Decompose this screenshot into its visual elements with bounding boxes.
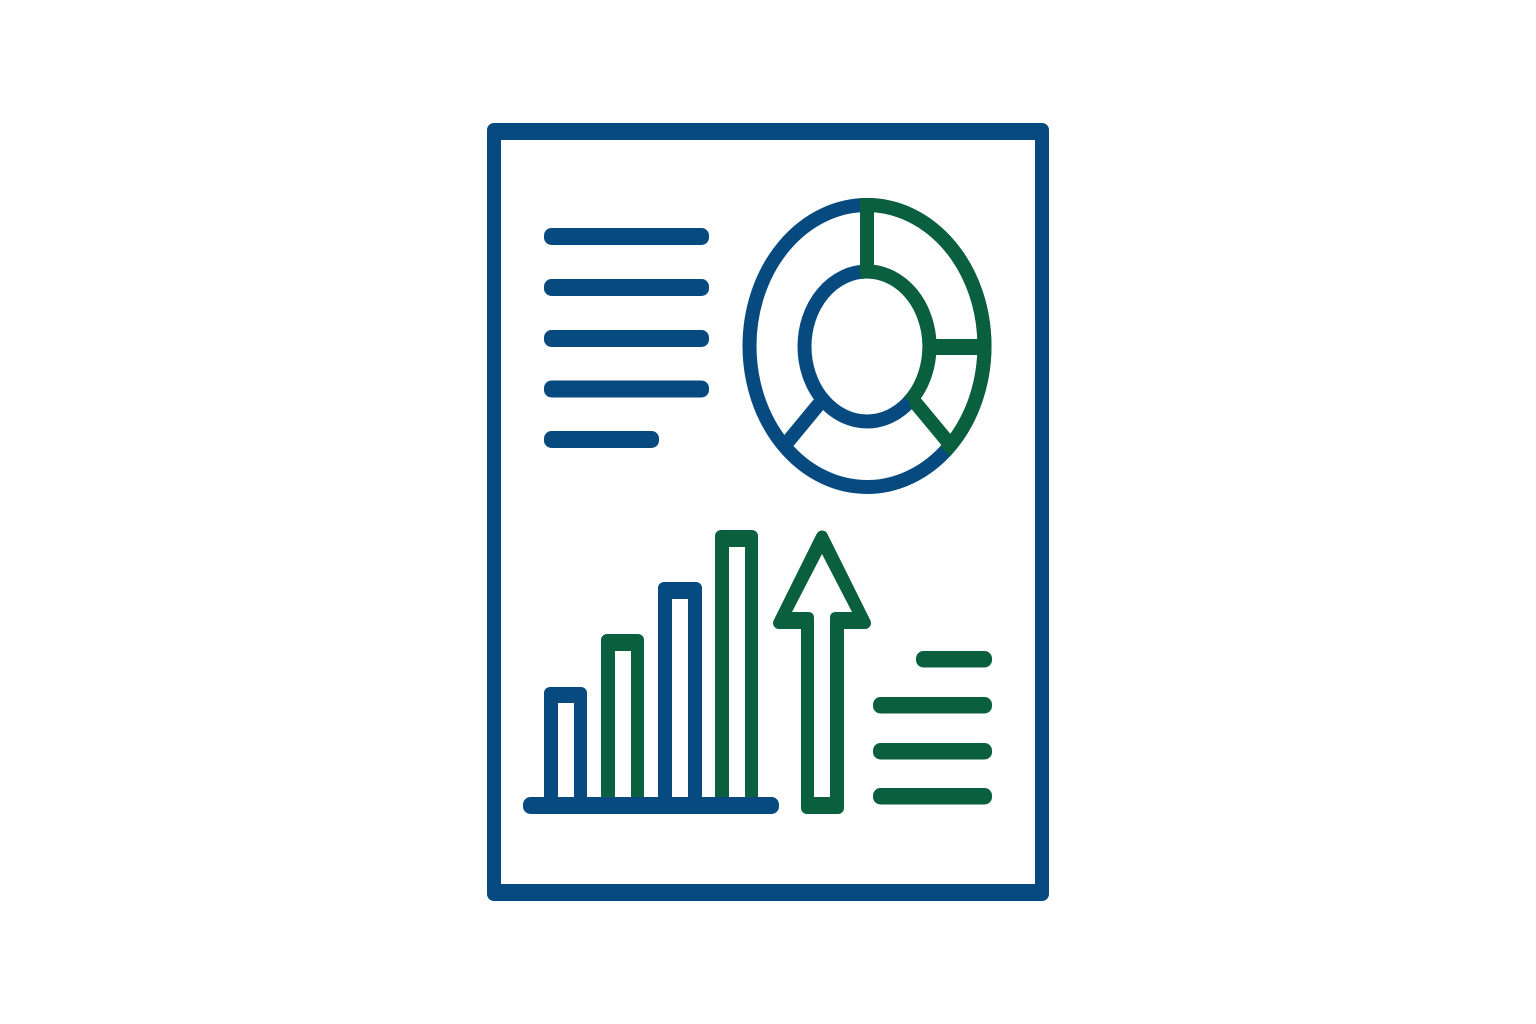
bar chart [523,530,779,814]
upward arrow [779,536,865,808]
text lines: lower right [873,651,992,804]
donut chart [750,199,984,487]
green ring segments and dividers [860,199,984,451]
bar 4 [715,530,758,800]
bar 3 [658,582,702,800]
blue ring and segment divider [750,205,984,487]
arrow interior [792,554,852,797]
bar 1 [544,687,587,800]
text lines: upper left [544,228,709,448]
baseline [523,797,779,814]
bar 2 [601,634,644,800]
page frame [487,123,1049,901]
arrow outline [779,536,865,808]
